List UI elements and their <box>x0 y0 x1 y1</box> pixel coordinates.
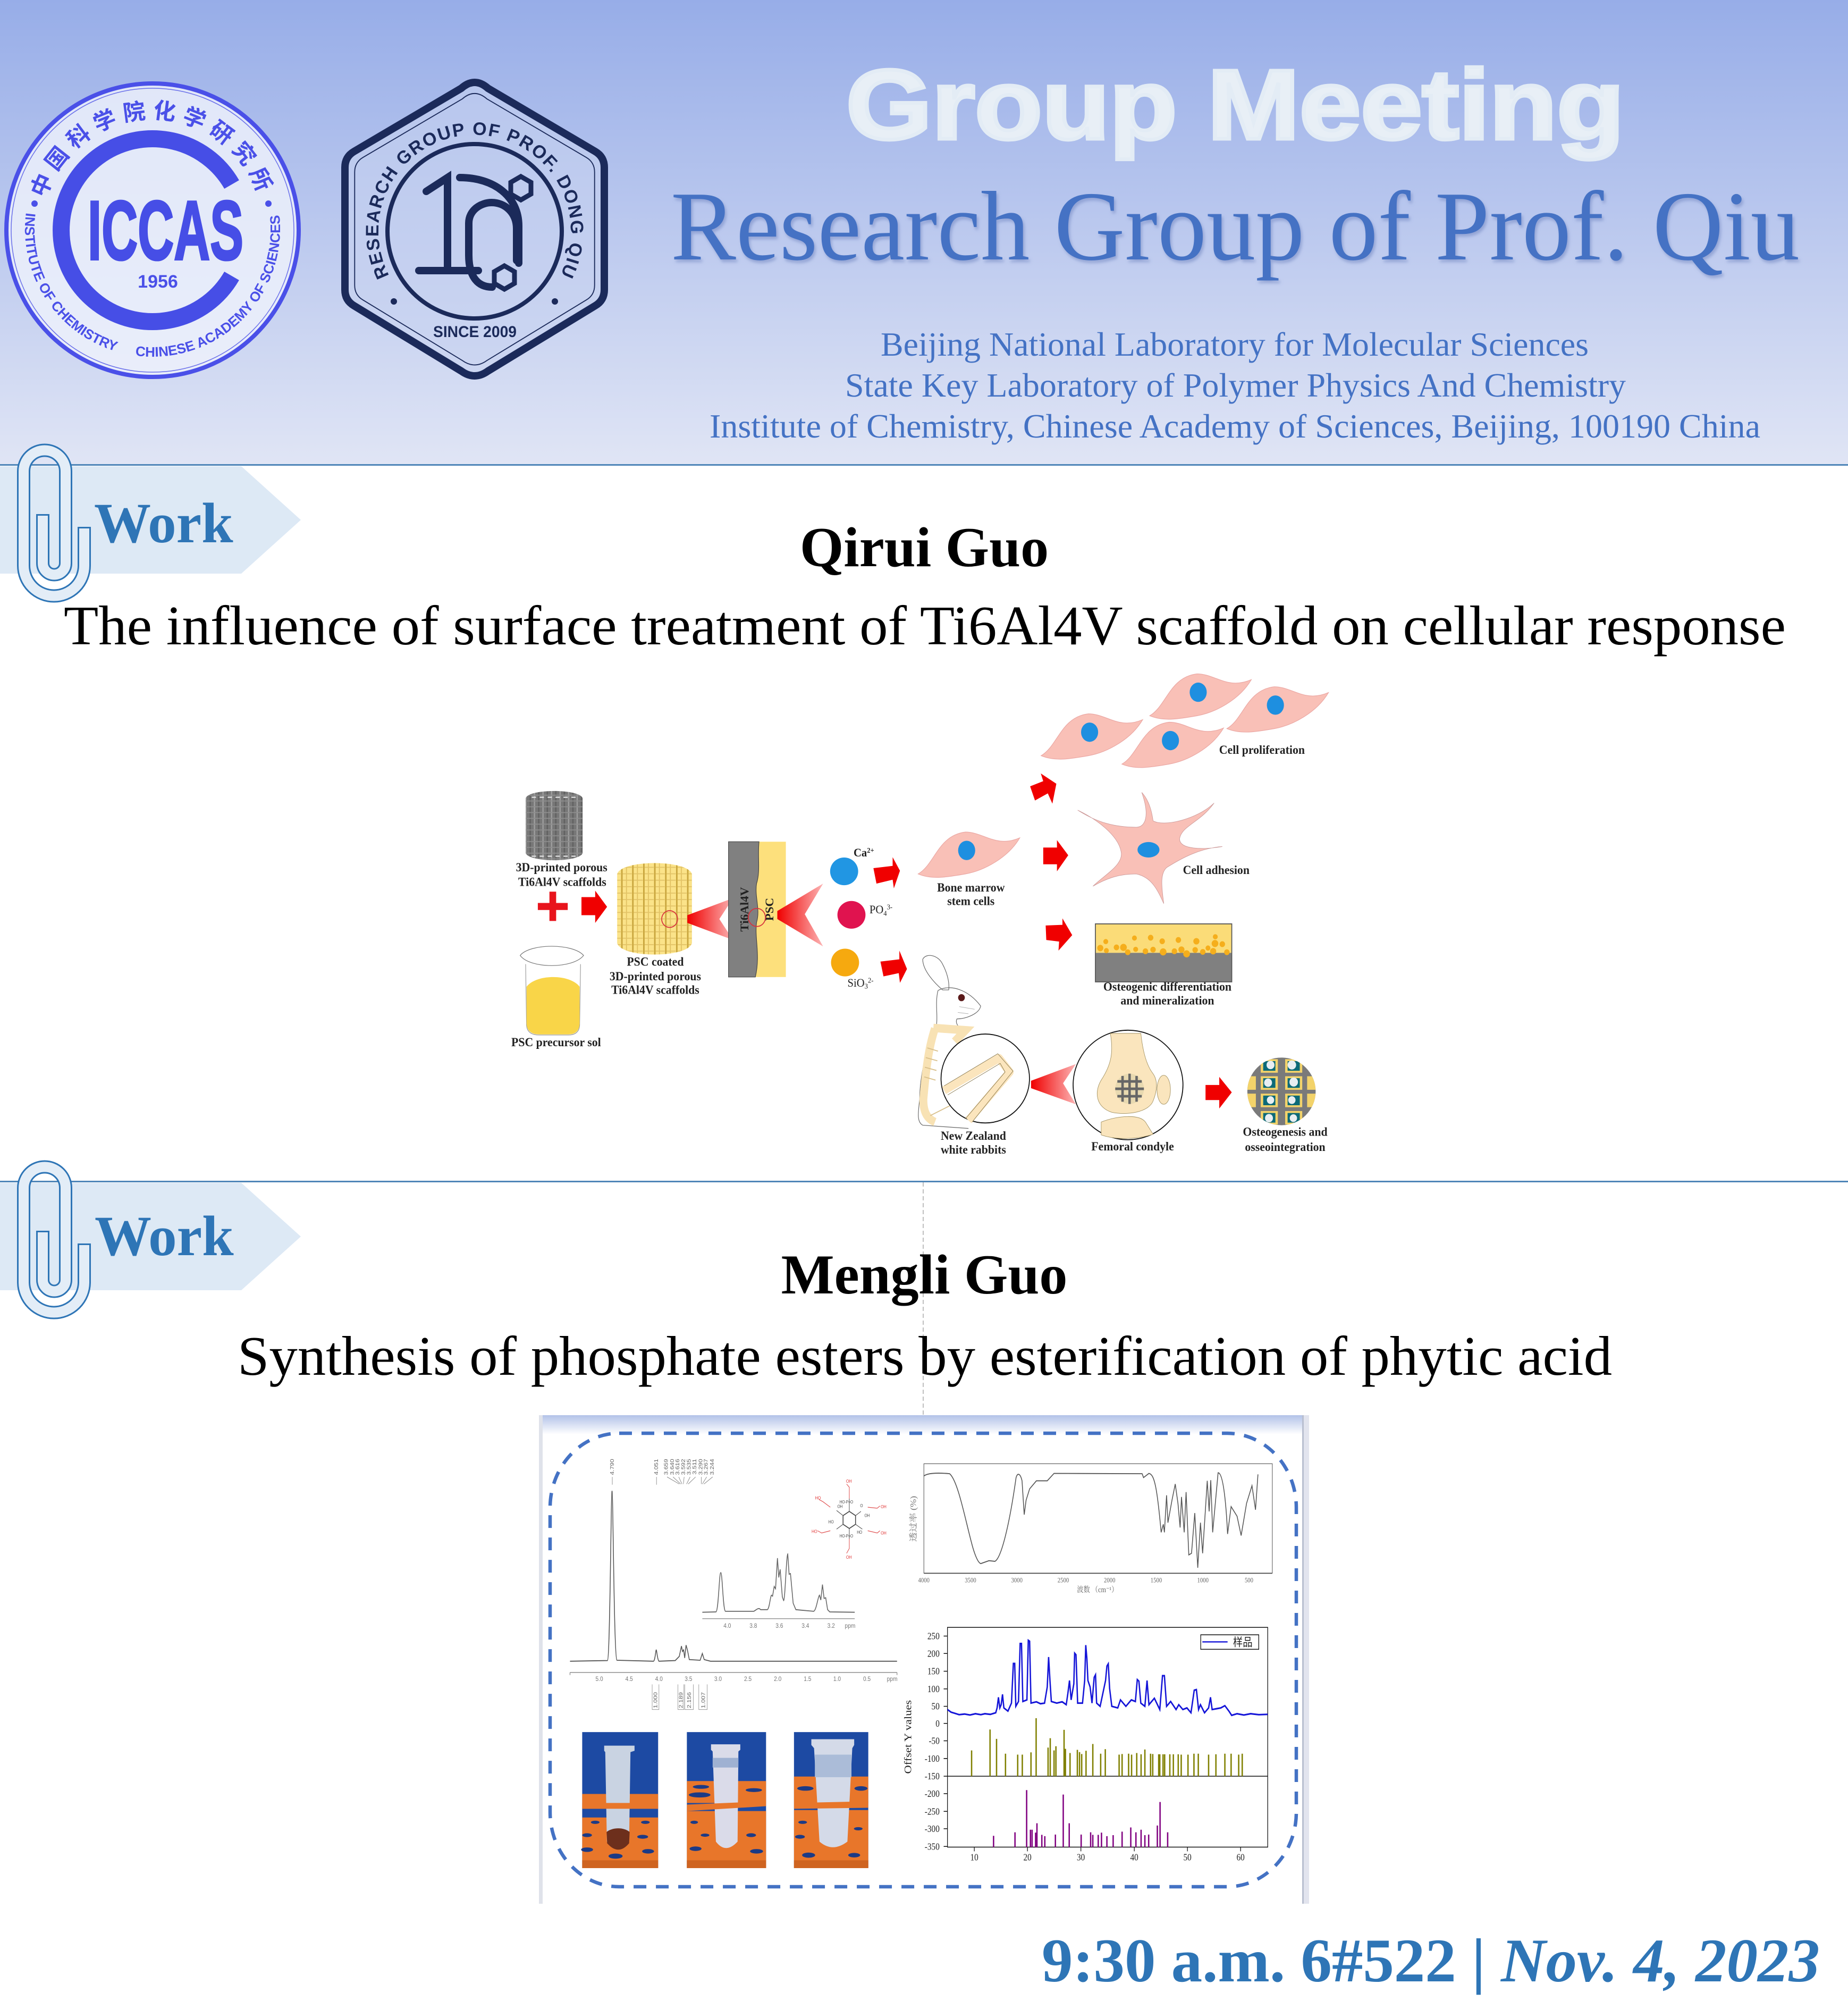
NMR spectrum: 1.007 <box>701 1692 706 1708</box>
NMR spectrum: ppm <box>887 1676 897 1683</box>
beaker label: PSC precursor sol <box>511 1036 601 1049</box>
coated scaffold label: PSC coated <box>627 955 684 969</box>
FTIR chart: 透过率 (%) <box>909 1496 918 1542</box>
panel content left: NMR and photos <box>570 1459 897 1868</box>
photo: brown sample tube <box>581 1732 658 1868</box>
molecule structure: HO <box>857 1529 862 1535</box>
mineralization label: Osteogenic differentiation <box>1103 980 1232 993</box>
XRD chart: -100 <box>925 1753 940 1764</box>
FTIR chart: 1500 <box>1151 1577 1162 1584</box>
NMR spectrum: 2.0 <box>774 1676 781 1683</box>
NMR spectrum: 3.0 <box>714 1676 722 1683</box>
adhesion label: Cell adhesion <box>1183 863 1250 877</box>
tag: Work 1 <box>0 450 301 596</box>
NMR inset: 3.8 <box>749 1623 757 1629</box>
title: Group Meeting: Group Meeting <box>846 50 1624 160</box>
XRD chart: 150 <box>927 1666 940 1677</box>
XRD chart: 100 <box>927 1684 940 1694</box>
osseointegration label <box>1243 1125 1328 1154</box>
NMR spectrum: 1.5 <box>804 1676 811 1683</box>
molecule structure: OH <box>846 1479 852 1484</box>
name: Qirui Guo: Qirui Guo <box>800 516 1049 578</box>
NMR spectrum: 4.0 <box>655 1676 663 1683</box>
XRD chart: 50 <box>1184 1852 1192 1863</box>
stem cell label: Bone marrow <box>937 881 1005 894</box>
FTIR chart: 1000 <box>1197 1577 1209 1584</box>
FTIR chart: 2500 <box>1058 1577 1069 1584</box>
osseointegration label: Osteogenesis and <box>1243 1125 1328 1139</box>
mineralization label <box>1103 980 1232 1007</box>
femoral label: Femoral condyle <box>1091 1139 1174 1153</box>
interface cross-section <box>729 842 786 977</box>
NMR spectrum: 4.790 <box>610 1459 615 1475</box>
interface cross-section: PSC <box>763 898 776 921</box>
XRD chart: -200 <box>925 1788 940 1799</box>
ions: SiO <box>848 976 865 989</box>
NMR inset: 4.0 <box>723 1623 731 1629</box>
NMR spectrum: 3.511 <box>692 1459 698 1475</box>
scaffold label: Ti6Al4V scaffolds <box>518 875 606 888</box>
arrow <box>1205 1077 1232 1108</box>
stem cell label <box>937 881 1005 908</box>
arrows from ions <box>873 857 907 983</box>
rabbit label <box>941 1129 1006 1156</box>
XRD chart: 40 <box>1130 1852 1138 1863</box>
molecule structure: HO-P=O <box>840 1534 853 1539</box>
XRD chart: 10 <box>971 1852 978 1863</box>
affiliation lines <box>710 325 1760 445</box>
arrows to outcomes <box>1030 774 1072 951</box>
molecule structure: HO-P=O <box>840 1499 853 1504</box>
osseointegration label: osseointegration <box>1245 1140 1326 1154</box>
ions: 2- <box>868 976 874 985</box>
NMR spectrum: 3.244 <box>710 1459 715 1475</box>
figure 1 right: biological response <box>918 674 1329 1156</box>
molecule structure: OH <box>881 1504 887 1509</box>
callout wedge <box>687 898 733 940</box>
FTIR chart: 3500 <box>965 1577 976 1584</box>
XRD chart: -300 <box>925 1823 940 1834</box>
logo: ICCAS seal <box>4 81 301 379</box>
NMR spectrum: 3.640 <box>670 1459 676 1475</box>
callout wedge <box>778 884 823 946</box>
ions: Ca <box>854 846 867 859</box>
molecule structure <box>812 1479 887 1560</box>
icon: plus <box>538 892 568 921</box>
photo: white sample tube <box>687 1732 766 1868</box>
NMR spectrum: 5.0 <box>595 1676 603 1683</box>
NMR inset: 3.6 <box>775 1623 783 1629</box>
arrow <box>581 890 607 923</box>
work title 1: The influence of surface treatment of Ti6Al4V scaffold on cellular response <box>64 594 1786 657</box>
NMR spectrum: 3.616 <box>675 1459 681 1475</box>
XRD chart: 60 <box>1237 1852 1245 1863</box>
icon: adherent cell <box>1078 793 1222 904</box>
name: Mengli Guo: Mengli Guo <box>781 1243 1067 1306</box>
XRD chart: -350 <box>925 1841 940 1852</box>
XRD chart: 30 <box>1077 1852 1085 1863</box>
NMR spectrum: 4.5 <box>626 1676 633 1683</box>
affiliation lines: Beijing National Laboratory for Molecular Sciences <box>881 325 1589 363</box>
mineralization block <box>1095 924 1232 982</box>
logo: ICCAS seal: ICCAS <box>88 184 243 278</box>
ions <box>830 846 892 990</box>
logo: ICCAS seal: 中国科学院化学研究所 <box>31 99 274 196</box>
icon: rabbit <box>918 955 981 1129</box>
footer: time, room and date: 9:30 a.m. 6#522 | Nov. 4, 2023 <box>1042 1927 1820 1995</box>
NMR spectrum: 0.5 <box>863 1676 871 1683</box>
magnifier circle: femoral condyle <box>1073 1030 1183 1140</box>
NMR inset: 3.2 <box>828 1623 835 1629</box>
FTIR chart <box>909 1464 1272 1594</box>
XRD chart: 250 <box>927 1630 940 1642</box>
icon: beaker <box>520 946 584 1035</box>
tag: Work 2 <box>0 1167 301 1313</box>
FTIR chart: 波数 （cm⁻¹） <box>1077 1585 1118 1594</box>
figure 1 left: materials and ions <box>511 791 907 1049</box>
scaffold label: 3D-printed porous <box>516 861 607 874</box>
interface cross-section: Ti6Al4V <box>738 887 751 932</box>
molecule structure: HO <box>829 1519 834 1525</box>
coated scaffold label: Ti6Al4V scaffolds <box>611 983 699 996</box>
icon: stem cell <box>918 832 1020 877</box>
molecule structure: OH <box>838 1504 842 1509</box>
magnifier circle: rabbit leg <box>941 1034 1030 1123</box>
NMR spectrum: 3.659 <box>663 1459 669 1475</box>
molecule structure: HO <box>815 1495 821 1501</box>
XRD chart: 样品 <box>1233 1633 1253 1650</box>
ions: PO <box>870 903 883 916</box>
panel content right: FTIR and XRD charts <box>903 1464 1272 1863</box>
rabbit label: New Zealand <box>941 1129 1006 1142</box>
XRD chart: -50 <box>929 1735 940 1746</box>
tag: Work 2: Work <box>95 1205 234 1268</box>
ions: 2+ <box>867 846 874 854</box>
subtitle: research group: Research Group of Prof. Qiu <box>671 172 1800 281</box>
NMR spectrum: 2.189 <box>678 1692 684 1708</box>
ions: 3- <box>887 903 892 911</box>
NMR spectrum: 2.5 <box>744 1676 752 1683</box>
logo: ICCAS seal: INSTITUTE OF CHEMISTRY <box>24 214 119 350</box>
logo: research group hexagon: SINCE 2009 <box>433 323 517 341</box>
molecule structure: HO <box>812 1529 817 1534</box>
molecule structure: OH <box>865 1513 870 1518</box>
XRD chart <box>903 1627 1268 1863</box>
NMR inset <box>702 1554 855 1629</box>
icon: osseointegration mesh <box>1246 1056 1317 1127</box>
work title 2: Synthesis of phosphate esters by esterification of phytic acid <box>238 1325 1612 1387</box>
rabbit label: white rabbits <box>941 1142 1006 1156</box>
NMR spectrum: 1.0 <box>833 1676 841 1683</box>
coated scaffold label: 3D-printed porous <box>610 969 701 983</box>
NMR spectrum <box>570 1459 897 1710</box>
NMR spectrum: 3.535 <box>686 1459 692 1475</box>
mineralization label: and mineralization <box>1120 994 1214 1007</box>
coated scaffold label <box>610 955 701 996</box>
XRD chart: -150 <box>925 1771 940 1782</box>
XRD chart: 50 <box>932 1701 940 1712</box>
NMR spectrum: 1.000 <box>653 1692 659 1708</box>
NMR spectrum: 4.051 <box>654 1459 659 1475</box>
XRD chart: 0 <box>935 1718 940 1729</box>
callout wedge <box>1031 1064 1076 1104</box>
NMR inset: 3.4 <box>801 1623 809 1629</box>
XRD chart: Offset Y values <box>903 1700 914 1774</box>
molecule structure: OH <box>846 1555 852 1560</box>
scaffold label <box>516 861 607 888</box>
XRD chart: 200 <box>927 1648 940 1659</box>
logo: research group hexagon: RESEARCH GROUP OF PROF. DONG QIU <box>366 122 584 280</box>
XRD chart: -250 <box>925 1806 940 1817</box>
ions: 4 <box>883 909 887 918</box>
proliferation label: Cell proliferation <box>1219 743 1305 756</box>
FTIR chart: 4000 <box>918 1577 930 1584</box>
section divider lines <box>0 464 1848 1415</box>
NMR spectrum: 3.267 <box>703 1459 709 1475</box>
logo: ICCAS seal: 1956 <box>138 272 178 292</box>
panel: characterization image frame <box>539 1415 1309 1904</box>
ions: 3 <box>865 982 868 990</box>
molecule structure: O <box>860 1503 863 1508</box>
proliferating cells <box>1041 674 1329 768</box>
NMR spectrum: 3.290 <box>698 1459 704 1475</box>
tag: Work 1: Work <box>94 492 233 555</box>
stem cell label: stem cells <box>947 894 995 908</box>
affiliation lines: Institute of Chemistry, Chinese Academy of Sciences, Beijing, 100190 China <box>710 407 1760 445</box>
NMR spectrum: 3.592 <box>681 1459 687 1475</box>
FTIR chart: 500 <box>1245 1577 1253 1584</box>
molecule structure: OH <box>881 1531 887 1536</box>
FTIR chart: 3000 <box>1011 1577 1023 1584</box>
NMR spectrum: 2.156 <box>687 1692 693 1708</box>
affiliation lines: State Key Laboratory of Polymer Physics And Chemistry <box>845 366 1626 404</box>
photo: powder sample tube <box>794 1732 868 1868</box>
FTIR chart: 2000 <box>1104 1577 1116 1584</box>
NMR inset: ppm <box>845 1623 855 1629</box>
icon: coated scaffold <box>617 863 692 955</box>
NMR spectrum: 3.5 <box>685 1676 692 1683</box>
XRD chart: 20 <box>1024 1852 1032 1863</box>
logo: research group hexagon <box>341 79 608 380</box>
header background <box>0 0 1848 465</box>
icon: grey scaffold <box>526 791 583 860</box>
logo: ICCAS seal: CHINESE ACADEMY OF SCIENCES <box>136 216 280 357</box>
